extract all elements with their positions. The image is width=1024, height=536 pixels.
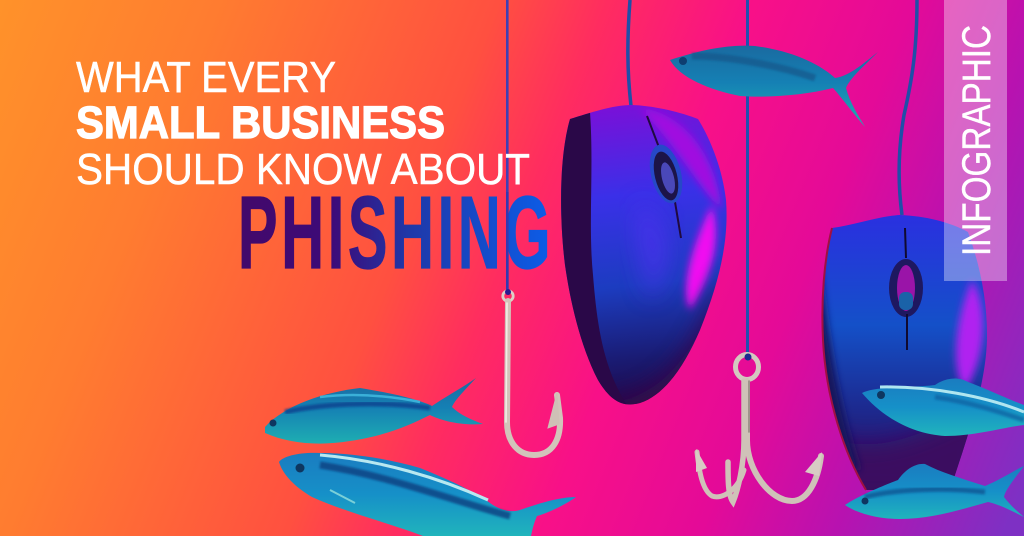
cords: mouse cables and treble hook line <box>628 0 917 355</box>
title: what every small business should know about: WHAT EVERY <box>76 53 336 102</box>
icon: treble fish hook <box>696 354 822 502</box>
panel: infographic tag <box>944 0 1007 281</box>
icon: fish right <box>862 378 1024 436</box>
mouse scroll wheel <box>644 141 688 207</box>
mouse button seam <box>905 228 907 350</box>
title: what every small business should know about <box>76 53 530 194</box>
title: what every small business should know about: SMALL BUSINESS <box>76 97 445 148</box>
icon: first computer mouse <box>555 105 730 420</box>
icon: large fish bottom left <box>279 453 576 536</box>
title: what every small business should know about: SHOULD KNOW ABOUT <box>76 145 530 194</box>
icon: single fish hook <box>503 289 560 455</box>
icon: fish bottom right <box>845 464 1024 519</box>
mouse edge glow <box>822 228 866 490</box>
heading: phishing: PHISHING <box>238 175 554 290</box>
icon: second computer mouse <box>815 215 987 500</box>
mouse scroll wheel <box>889 259 923 317</box>
mouse button seam <box>647 116 681 238</box>
cord over heading <box>506 192 509 292</box>
mouse shading <box>823 273 987 490</box>
icon: fish top centre <box>670 46 878 127</box>
cord: first hook line <box>506 0 509 292</box>
mouse shading <box>555 108 730 420</box>
icon: fish lower left <box>265 378 483 444</box>
